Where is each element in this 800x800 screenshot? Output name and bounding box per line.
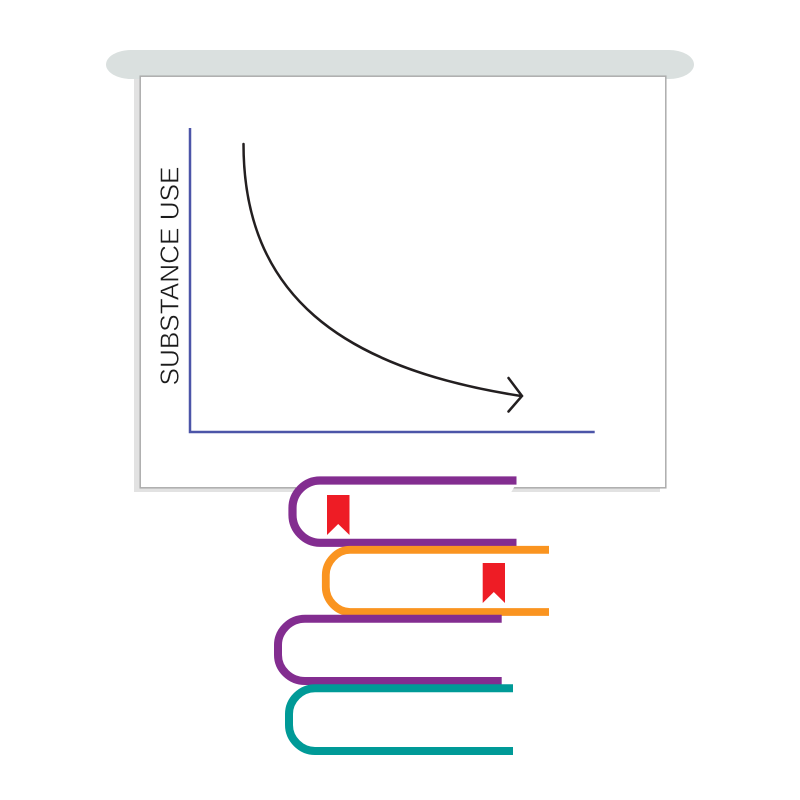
book 1: purple bbox=[292, 480, 516, 543]
screen panel bbox=[140, 76, 666, 488]
y axis label: SUBSTANCE USE bbox=[156, 166, 184, 386]
page mask bbox=[296, 484, 516, 492]
book cover bbox=[292, 480, 516, 543]
bookmark bbox=[327, 495, 350, 535]
book 4: teal bbox=[289, 688, 513, 751]
book cover bbox=[326, 550, 549, 612]
screen roller bar bbox=[106, 50, 694, 79]
bookmark bbox=[483, 563, 505, 603]
book cover bbox=[289, 688, 513, 751]
book cover bbox=[278, 619, 502, 681]
projector screen bbox=[106, 50, 694, 492]
declining curve bbox=[244, 144, 521, 396]
screen shadow bbox=[134, 79, 660, 492]
chart axes bbox=[190, 128, 595, 432]
line chart: substance use declining bbox=[156, 128, 595, 432]
book 3: purple bbox=[278, 619, 502, 681]
book 2: orange bbox=[326, 550, 549, 612]
stack of books bbox=[278, 480, 549, 751]
arrowhead bbox=[508, 378, 522, 412]
